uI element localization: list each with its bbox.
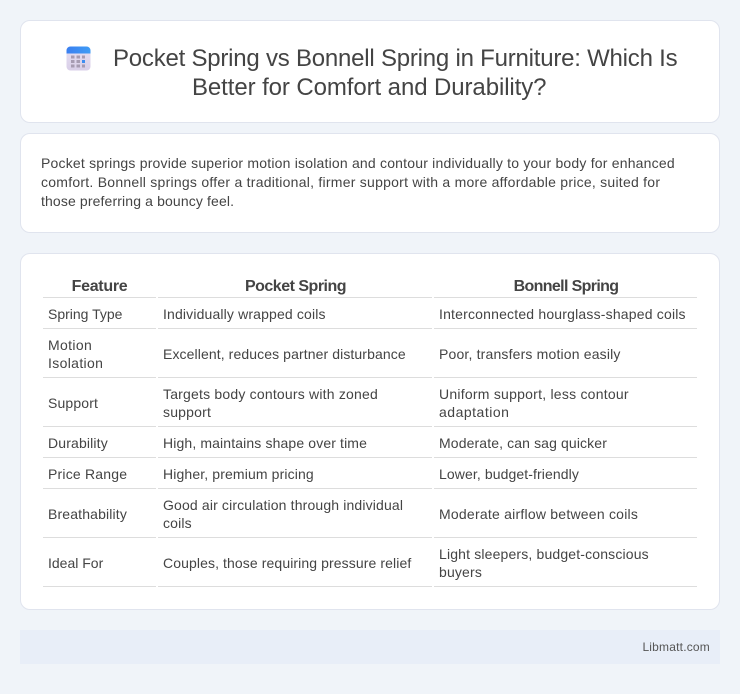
row: Ideal For: buyers [439, 564, 482, 580]
row: Support: adaptation [439, 404, 509, 420]
row: Support: Targets body contours with zoned [163, 386, 378, 402]
summary text [41, 155, 675, 209]
title [113, 45, 677, 101]
header: Feature: Feature [72, 278, 127, 295]
row: Spring Type: Individually wrapped coils [163, 306, 326, 322]
row: Price Range: Price Range [48, 466, 127, 482]
row: Durability: Durability [48, 435, 108, 451]
title: Better for Comfort and Durability? [192, 74, 546, 101]
row: Motion Isolation: Poor, transfers motion easily [439, 346, 621, 362]
row: Ideal For: Ideal For [48, 555, 103, 571]
row: Durability: Moderate, can sag quicker [439, 435, 607, 451]
footer [20, 630, 720, 664]
header: Bonnell Spring: Bonnell Spring [514, 278, 618, 295]
row: Breathability: Breathability [48, 506, 127, 522]
row: Price Range: Lower, budget-friendly [439, 466, 579, 482]
row: Spring Type [48, 306, 686, 322]
row: Durability [48, 435, 607, 451]
row: Breathability: coils [163, 515, 192, 531]
footer credit: Libmatt.com [642, 640, 710, 654]
row: Price Range [48, 466, 579, 482]
row: Ideal For: Light sleepers, budget-conscious [439, 546, 649, 562]
row: Durability: High, maintains shape over time [163, 435, 367, 451]
title: Pocket Spring vs Bonnell Spring in Furniture: Which Is [113, 45, 677, 72]
row: Breathability [48, 497, 638, 531]
row: Support: support [163, 404, 211, 420]
row: Spring Type: Interconnected hourglass-shaped coils [439, 306, 686, 322]
summary text: those preferring a bouncy feel. [41, 193, 234, 209]
summary text: Pocket springs provide superior motion isolation and contour individually to your body for enhanced [41, 155, 675, 171]
summary text: comfort. Bonnell springs offer a traditional, firmer support with a more affordable price, suited for [41, 174, 660, 190]
row: Motion Isolation: Excellent, reduces partner disturbance [163, 346, 406, 362]
row: Price Range: Higher, premium pricing [163, 466, 314, 482]
panel: summary [20, 133, 720, 233]
row: Ideal For: Couples, those requiring pressure relief [163, 555, 411, 571]
row: Breathability: Good air circulation through individual [163, 497, 403, 513]
row: Ideal For [48, 546, 649, 580]
panel: title card [20, 20, 720, 123]
row: Motion Isolation: Isolation [48, 355, 103, 371]
panel: comparison table [20, 253, 720, 610]
row: Support [48, 386, 629, 420]
row: Support: Uniform support, less contour [439, 386, 629, 402]
row: Support: Support [48, 395, 98, 411]
icon: calendar grid [66, 46, 90, 70]
row: Motion Isolation [48, 337, 621, 371]
row: Motion Isolation: Motion [48, 337, 92, 353]
header: Pocket Spring: Pocket Spring [245, 278, 346, 295]
row: Spring Type: Spring Type [48, 306, 122, 322]
row: Breathability: Moderate airflow between coils [439, 506, 638, 522]
